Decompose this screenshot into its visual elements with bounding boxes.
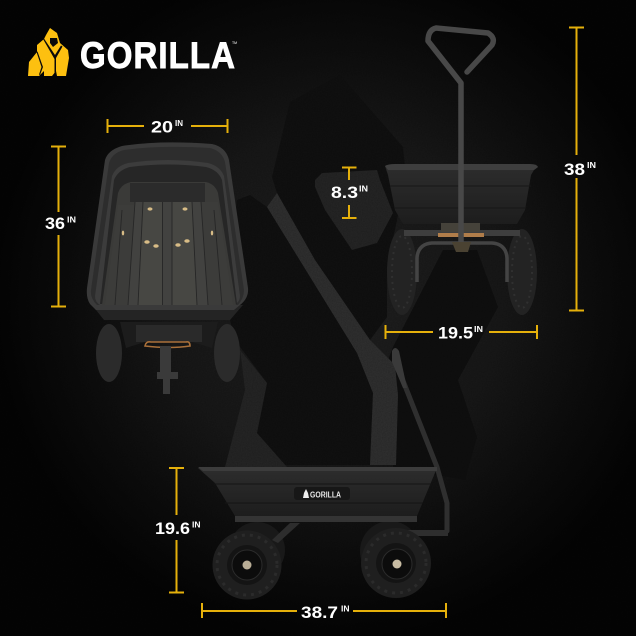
- wheels: [96, 324, 122, 382]
- handle: [398, 368, 447, 531]
- brass bolts: [122, 207, 213, 248]
- wheels: [387, 229, 417, 315]
- dimension: 20 in width: 20: [151, 118, 173, 136]
- icon: gorilla: [28, 28, 69, 76]
- front wheel back: [229, 522, 285, 578]
- tub rim: [198, 467, 437, 471]
- tub: [198, 468, 437, 516]
- floor ribs: [162, 202, 172, 305]
- tub rim: [385, 164, 538, 170]
- dimension: 19.5 in track: IN: [474, 325, 483, 334]
- tub ridges: [214, 484, 431, 503]
- undercarriage: [120, 322, 218, 348]
- central light band: [267, 193, 398, 465]
- dimension: 20 in width: [108, 118, 228, 136]
- floor: [105, 202, 230, 305]
- dimension: 20 in width: IN: [175, 119, 183, 128]
- wordmark: GORILLA: [80, 35, 235, 76]
- tub: [385, 165, 538, 224]
- back step: [130, 183, 205, 202]
- brackets: [441, 223, 480, 232]
- strut: [272, 523, 300, 543]
- watermark: gorilla silhouette: [225, 75, 498, 480]
- cart: top view: [87, 142, 248, 394]
- dimension: 38 in height: 38: [564, 160, 585, 179]
- lower-left light band: [225, 350, 287, 467]
- dimension: 38 in height: [564, 28, 596, 310]
- rear brace: [407, 530, 448, 536]
- dimension: 19.6 in height: [155, 468, 201, 592]
- drawbar: [157, 346, 178, 394]
- left arm dark shape: [225, 195, 373, 465]
- inner ledge: [95, 160, 240, 305]
- dimension: 38.7 in length: IN: [341, 604, 350, 614]
- shelf: [102, 182, 236, 305]
- dimension: 38.7 in length: [202, 603, 446, 622]
- dimension: 8.3 in depth: 8.3: [331, 183, 358, 202]
- logo: [28, 28, 237, 76]
- dimension: 36 in length: IN: [67, 216, 76, 224]
- label icon: [303, 489, 309, 498]
- tub ridges: [390, 186, 531, 208]
- right lower dark shape: [387, 250, 498, 480]
- rear wheel: [361, 528, 431, 598]
- dimension: 36 in length: 36: [45, 214, 65, 233]
- icon detail: gorilla face and lines: [36, 38, 62, 75]
- cart: front view: [385, 28, 538, 315]
- dimension: 36 in length: [45, 146, 76, 306]
- dimension: 8.3 in depth: [331, 168, 368, 218]
- brass handle: [145, 342, 190, 348]
- chassis: [235, 516, 417, 522]
- front wheel: [212, 530, 282, 600]
- rear wheel back: [360, 521, 420, 581]
- hitch: [452, 242, 471, 252]
- axle frame: [417, 243, 507, 282]
- trademark: TM: [232, 41, 237, 45]
- dimension: 8.3 in depth: IN: [359, 184, 368, 194]
- handle: [428, 28, 493, 243]
- dimension: 19.6 in height: IN: [192, 520, 201, 530]
- inner cavity: [100, 164, 237, 304]
- dimension: 19.5 in track: [386, 324, 537, 342]
- head and chest dark shape: [272, 75, 405, 340]
- dimension: 38 in height: IN: [587, 161, 596, 170]
- bed lip: [92, 305, 243, 320]
- cart: side view: [198, 348, 448, 600]
- dimension: 19.5 in track: 19.5: [438, 324, 473, 342]
- handle grip: [392, 348, 407, 388]
- label plate: [294, 487, 350, 500]
- bed rim: [87, 142, 248, 310]
- label text: GORILLA: [310, 490, 341, 500]
- dimension: 19.6 in height: 19.6: [155, 519, 190, 538]
- dimension: 38.7 in length: 38.7: [301, 603, 338, 622]
- upper wall: [91, 147, 244, 305]
- muzzle hexagon: [315, 170, 393, 250]
